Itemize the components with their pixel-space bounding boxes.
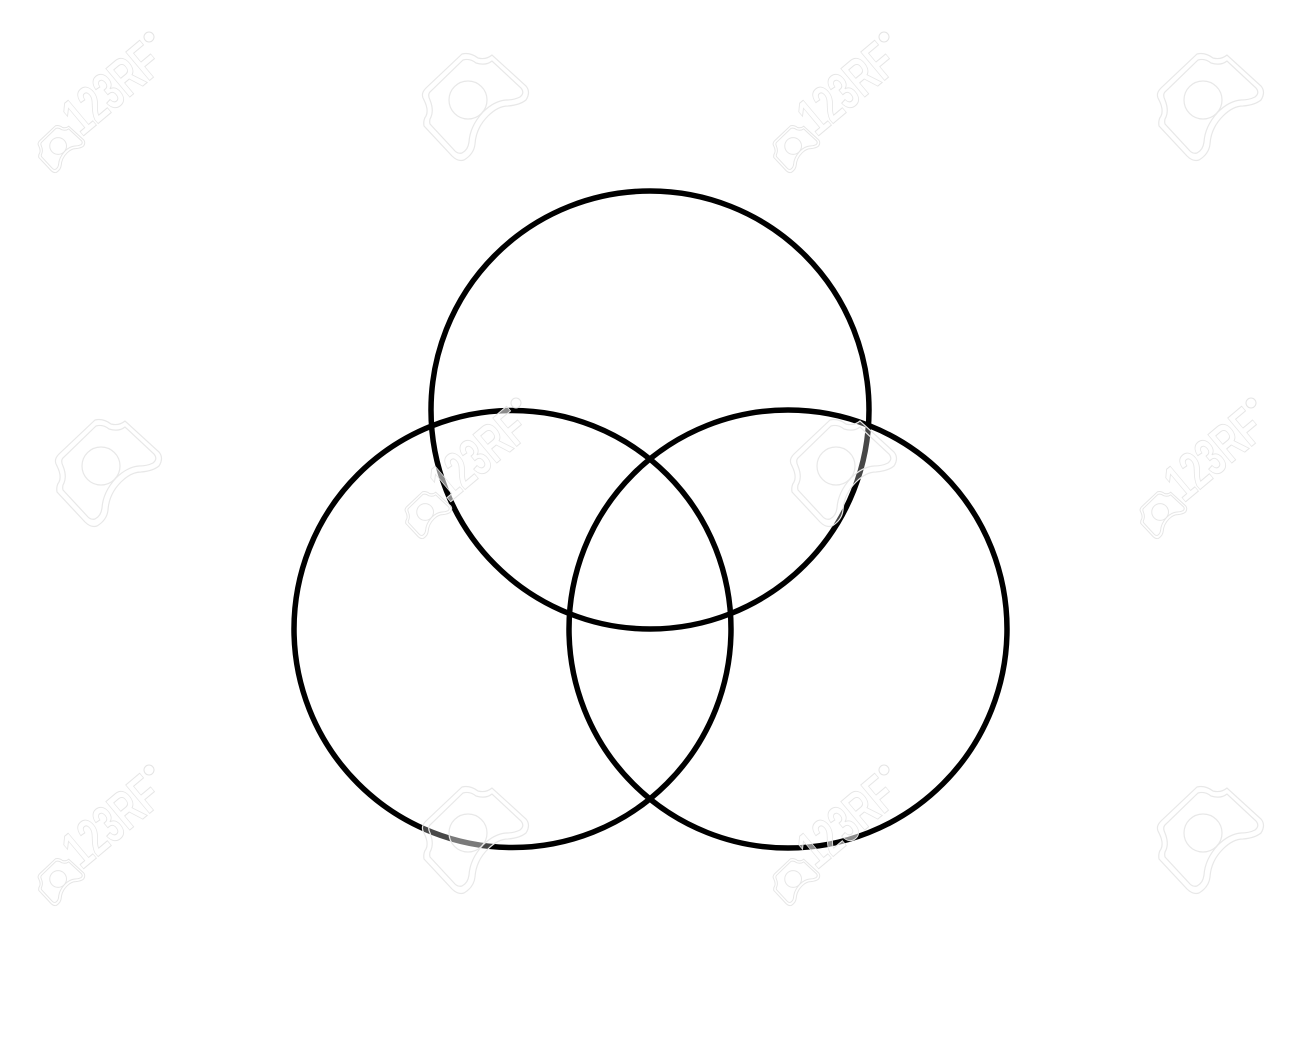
watermark: row 1 left: 123RF: [51, 31, 172, 146]
icon: watermark logo bottom centre: [422, 786, 528, 894]
watermark: row 1 left: [38, 31, 172, 173]
icon: watermark logo middle centre: [790, 420, 896, 526]
watermark: row 2 left: 123RF: [418, 397, 539, 512]
circle: top: [431, 191, 869, 629]
icon: watermark logo top centre: [422, 54, 528, 160]
watermark: row 2 left: [405, 397, 539, 539]
watermark: row 3 left: 123RF: [51, 764, 172, 879]
icon: watermark logo bottom right: [1157, 786, 1264, 894]
circle: bottom left: [294, 410, 731, 848]
watermark: row 3 right: [773, 764, 907, 906]
icon: watermark logo top right: [1157, 54, 1264, 160]
watermark: row 3 right: 123RF: [786, 764, 907, 879]
circle: bottom right: [569, 410, 1007, 848]
watermark: row 2 right: [1140, 397, 1274, 539]
watermark: row 3 left: [38, 764, 172, 906]
icon: watermark logo middle left: [55, 420, 162, 526]
watermark: row 1 right: [773, 31, 907, 173]
watermark: row 1 right: 123RF: [786, 31, 907, 146]
venn diagram: [294, 191, 1007, 848]
